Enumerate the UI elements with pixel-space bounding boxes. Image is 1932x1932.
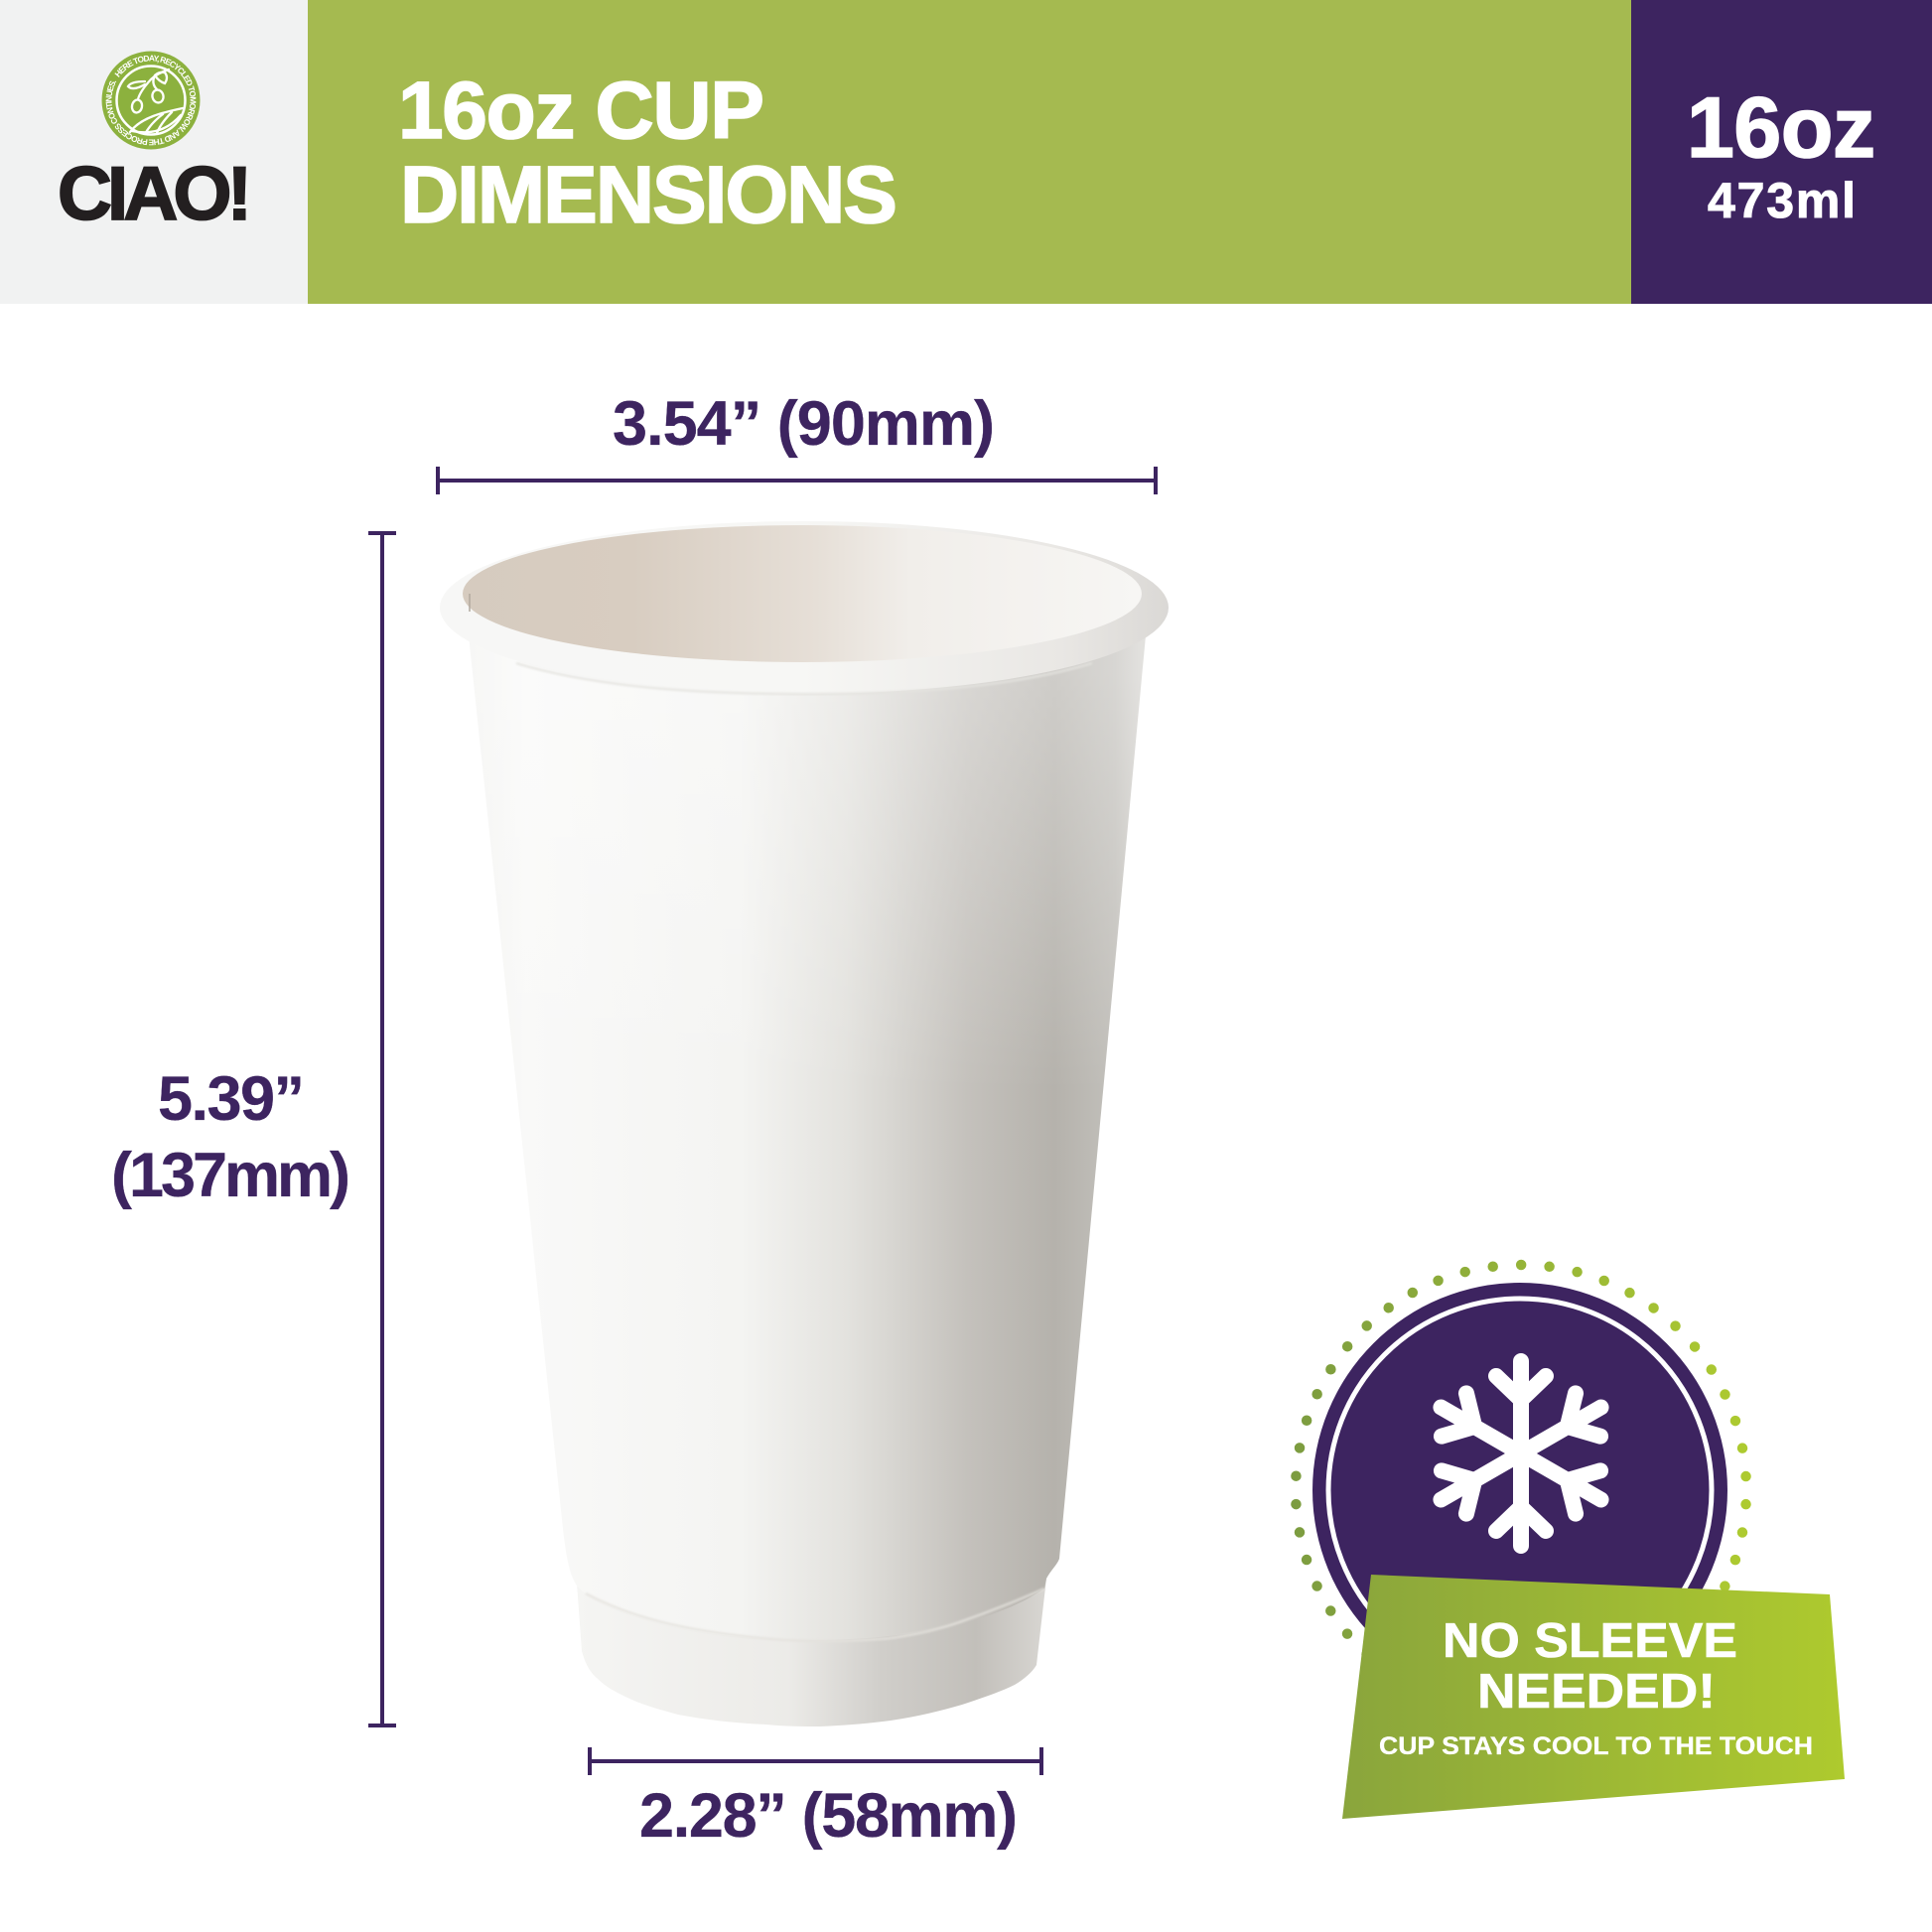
logo: CIAO wordmark: CIAO! (58, 152, 252, 236)
dimension line: base width (590, 1747, 1041, 1775)
purple circle (1312, 1283, 1727, 1698)
banner heading line 2: NEEDED! (1477, 1665, 1716, 1719)
dimension line: height (368, 532, 396, 1726)
capacity: ounces: 16oz (1687, 80, 1875, 176)
no sleeve badge (1296, 1265, 1845, 1819)
cup base (577, 1579, 1046, 1726)
title line 1: 16oz CUP (398, 66, 764, 156)
logo: round recycled emblem: HERE TODAY, RECYCLED TOMORROW. AND THE PROCESS CONTINUES. (105, 56, 197, 145)
label: base width: 2.28” (58mm) (639, 1781, 1018, 1851)
label: height millimetres: (137mm) (111, 1141, 350, 1210)
header: logo panel (0, 0, 308, 304)
label: height inches: 5.39” (158, 1064, 305, 1134)
cup rim lower shadow (516, 663, 1092, 694)
bottom width dimension (590, 1747, 1041, 1851)
cup interior (463, 525, 1142, 662)
cup interior seam (469, 594, 471, 612)
top width dimension (438, 389, 1156, 494)
dotted ring (1296, 1265, 1746, 1716)
banner subtext: CUP STAYS COOL TO THE TOUCH (1379, 1732, 1813, 1760)
cup body (469, 635, 1146, 1640)
capacity: millilitres: 473ml (1708, 173, 1856, 228)
header: title panel (308, 0, 1631, 304)
dimension line: rim width (438, 467, 1156, 494)
title line 2: DIMENSIONS (400, 150, 897, 240)
cup body upper highlight (469, 635, 1146, 1092)
icon: snowflake (1429, 1361, 1613, 1546)
height dimension (111, 532, 396, 1726)
header: capacity panel (1631, 0, 1932, 304)
cup rim (440, 521, 1169, 694)
cup base seam (586, 1588, 1044, 1641)
label: rim width: 3.54” (90mm) (613, 389, 995, 459)
white paper cup (440, 521, 1169, 1726)
banner heading line 1: NO SLEEVE (1443, 1614, 1737, 1668)
green banner (1342, 1575, 1845, 1819)
